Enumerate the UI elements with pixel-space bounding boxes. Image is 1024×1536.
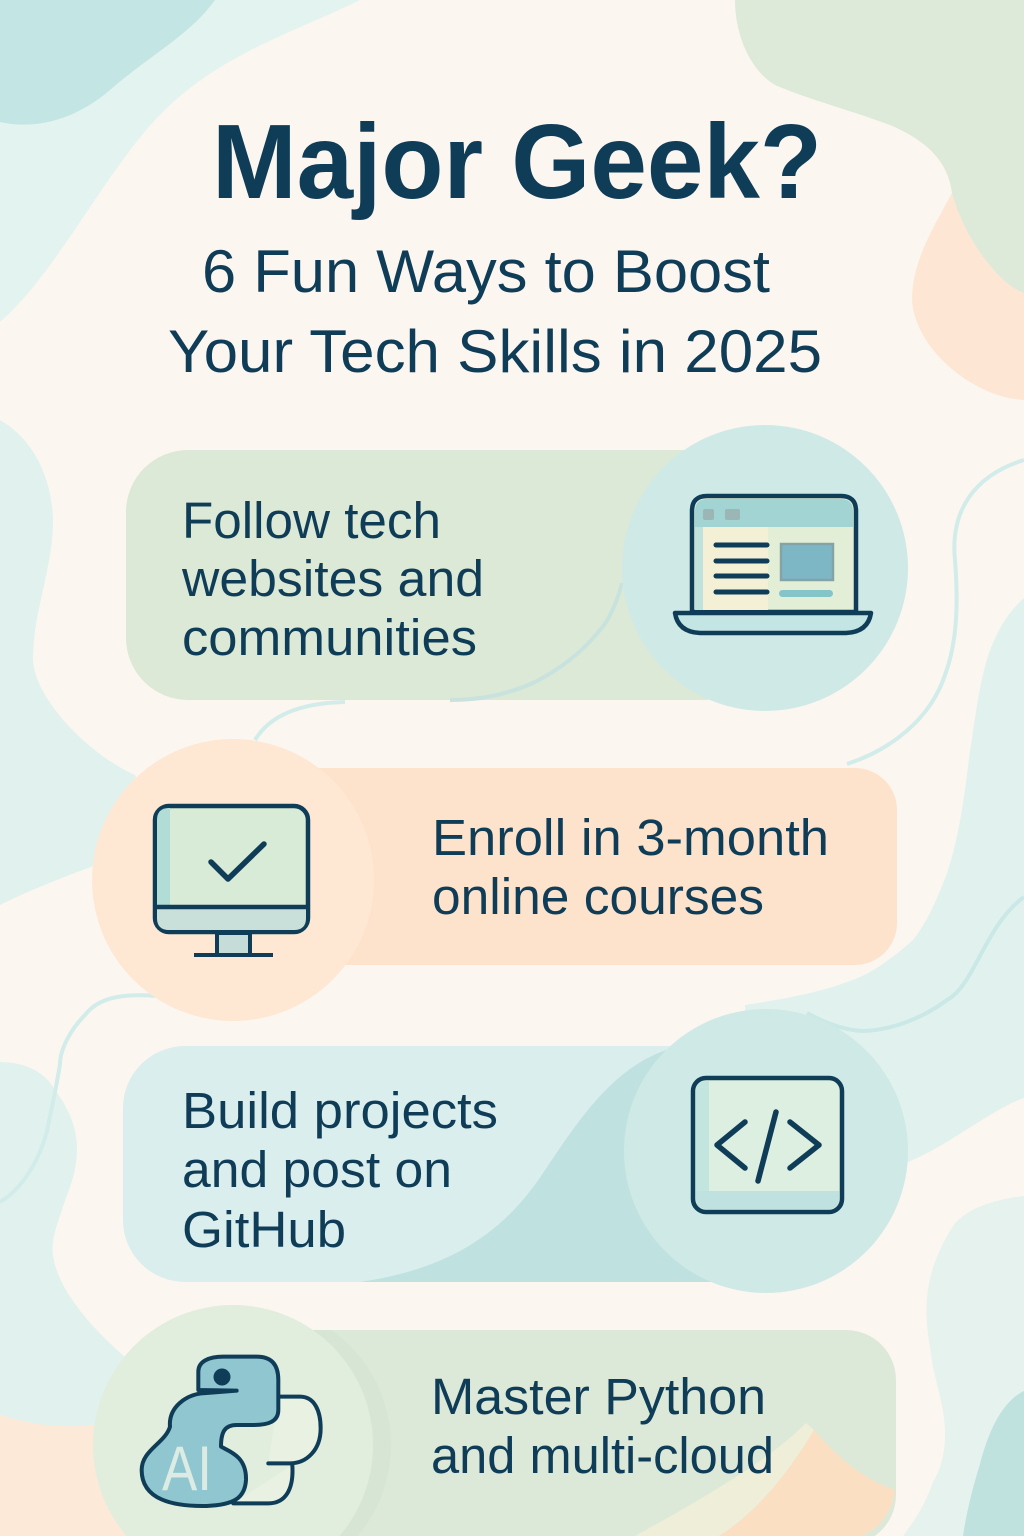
subtitle: 6 Fun Ways to Boost (202, 238, 770, 305)
step text (432, 809, 829, 925)
icon circle (92, 739, 374, 1021)
step text: Build projects (182, 1082, 498, 1139)
icon circle (93, 1305, 373, 1536)
icon: code brackets (693, 1078, 842, 1212)
step text: online courses (432, 868, 764, 925)
step text: communities (182, 609, 477, 666)
step text (181, 492, 484, 666)
subtitle: Your Tech Skills in 2025 (168, 318, 822, 385)
step text: Master Python (431, 1368, 766, 1425)
icon circle (622, 425, 908, 711)
icon: python snake with AI (142, 1357, 321, 1506)
step text: Follow tech (182, 492, 441, 549)
step text: and multi-cloud (431, 1427, 774, 1484)
step text (431, 1368, 774, 1484)
icon: python snake with AI: AI (162, 1434, 212, 1504)
panel: build projects (123, 1009, 908, 1293)
panel: master python (93, 1304, 896, 1536)
step text: and post on (182, 1141, 452, 1198)
panel: enroll in courses (92, 739, 897, 1021)
icon circle (624, 1009, 908, 1293)
card background (230, 1330, 896, 1536)
title: Major Geek? (212, 103, 822, 221)
step text: Enroll in 3-month (432, 809, 829, 866)
step text (182, 1082, 498, 1258)
step text: GitHub (182, 1201, 346, 1258)
icon: monitor with check (155, 806, 308, 955)
panel: follow tech websites (126, 425, 908, 711)
step text: websites and (181, 550, 484, 607)
card background (230, 768, 897, 965)
card background (126, 450, 766, 700)
icon: laptop (675, 496, 871, 633)
subtitle (168, 238, 822, 385)
card background (123, 1046, 763, 1282)
